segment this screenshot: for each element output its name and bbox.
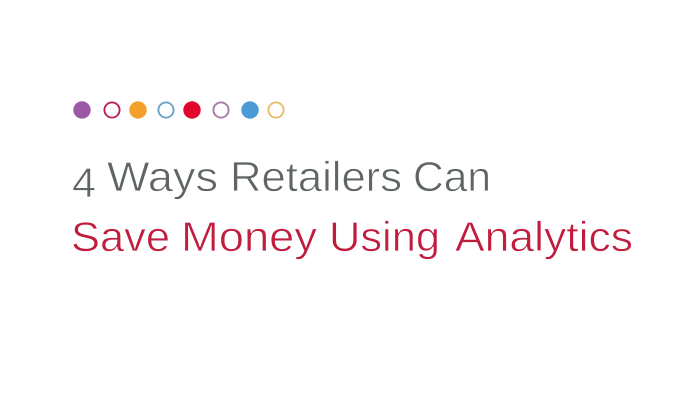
decorative row of dots	[73, 101, 284, 119]
heading line 2: Using	[329, 213, 440, 260]
heading line 1: Can	[413, 153, 491, 200]
heading line 2: Analytics	[455, 213, 633, 260]
heading line 1: Retailers	[230, 153, 402, 200]
heading line 2: Money	[181, 213, 317, 260]
heading line 1: Ways	[107, 153, 218, 200]
heading line 1: 4	[72, 159, 96, 206]
heading line 2: Save	[71, 213, 170, 260]
heading line 2	[71, 213, 633, 260]
heading line 1	[72, 153, 491, 206]
